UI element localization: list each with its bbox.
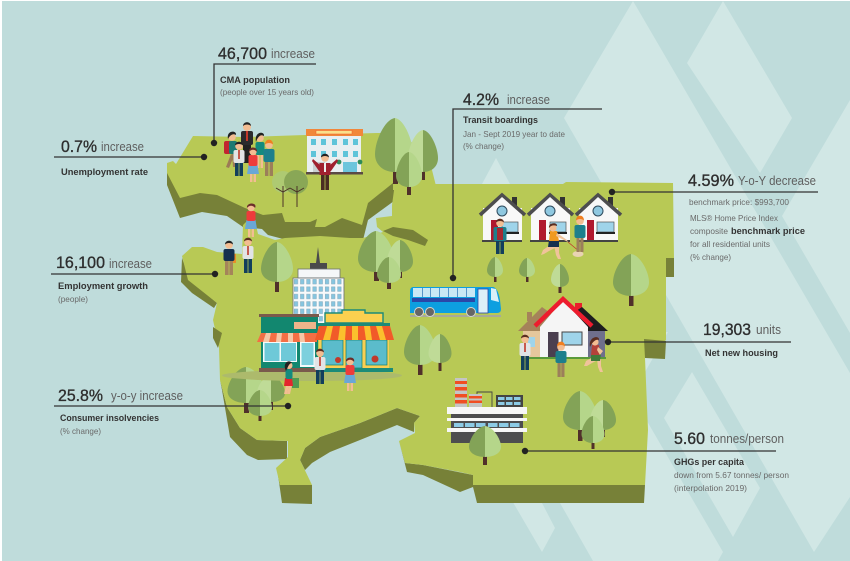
house 1 (480, 195, 525, 242)
callout: transit boardings: Transit boardings (463, 115, 538, 126)
girl at shop (344, 358, 356, 391)
callout: employment growth: (people) (58, 294, 88, 304)
callout: net new housing: Net new housing (705, 348, 778, 359)
man with tie (242, 238, 254, 273)
man at new house (520, 335, 530, 370)
callout: home price index: MLS® Home Price Index (690, 213, 779, 223)
boy at new house (556, 342, 566, 377)
callout: consumer insolvencies (54, 386, 291, 436)
callout: home price index: benchmark price: $993,700 (689, 197, 789, 207)
map top surface (167, 133, 674, 485)
callout: employment growth: 16,100 (56, 253, 105, 272)
callout: home price index: for all residential units (690, 239, 770, 249)
office tower (293, 247, 344, 324)
inner cliffs (213, 227, 666, 359)
callout: net new housing (605, 320, 791, 359)
hotel building (306, 129, 363, 174)
factory (447, 378, 527, 465)
callout: home price index: Y-o-Y decrease (738, 174, 816, 188)
man in white shirt (234, 142, 244, 176)
boy with bag (224, 241, 236, 275)
callout: CMA population: 46,700 (218, 44, 267, 63)
callout: home price index: (% change) (690, 252, 731, 262)
callout: CMA population: increase (271, 47, 315, 61)
man with glasses (241, 122, 253, 163)
callout: GHGs per capita: down from 5.67 tonnes/ person (674, 470, 789, 480)
background diamonds (482, 1, 850, 561)
callout: GHGs per capita: tonnes/person (710, 432, 784, 446)
callout: consumer insolvencies: Consumer insolvencies (60, 413, 159, 424)
callout: GHGs per capita: GHGs per capita (674, 457, 745, 468)
map (167, 133, 674, 504)
runner with dog (541, 223, 580, 259)
callout: home price index: composite (690, 226, 728, 236)
trees (228, 118, 649, 449)
callout: home price index (609, 171, 818, 262)
yellow shop (315, 310, 394, 372)
house 3 (576, 195, 621, 242)
teal shop (257, 314, 319, 372)
dog (572, 251, 584, 257)
people (224, 122, 603, 394)
woman jogging (584, 337, 603, 372)
man with orange hair (264, 140, 274, 176)
callout: consumer insolvencies: 25.8% (58, 386, 103, 405)
callout: transit boardings: 4.2% (463, 90, 499, 109)
callout: consumer insolvencies: y-o-y increase (111, 389, 183, 403)
man with orange hair at house (574, 216, 586, 252)
man at house (494, 219, 506, 254)
callout: GHGs per capita (522, 429, 789, 493)
callout: unemployment rate: 0.7% (61, 137, 97, 156)
callout: unemployment rate: increase (101, 140, 144, 154)
house 2 (528, 195, 573, 242)
man with newspaper (314, 349, 326, 384)
girl with red backpack (224, 132, 237, 168)
woman shopping (284, 361, 299, 394)
callout: net new housing: 19,303 (703, 320, 751, 339)
callout: unemployment rate: Unemployment rate (61, 167, 148, 178)
callout: transit boardings: increase (507, 93, 550, 107)
callout: CMA population: (people over 15 years old) (220, 87, 314, 97)
callout: employment growth (51, 253, 218, 304)
callout: home price index: 4.59% (688, 171, 734, 190)
callout: transit boardings (450, 90, 602, 281)
girl in teal (256, 133, 264, 168)
bus (410, 287, 501, 317)
new housing house (518, 299, 608, 359)
callout: employment growth: increase (109, 257, 152, 271)
callout: GHGs per capita: (interpolation 2019) (674, 483, 747, 493)
callout: transit boardings: Jan - Sept 2019 year to date (463, 129, 565, 139)
girl on the bridge (245, 204, 257, 237)
callout: home price index: benchmark price (731, 226, 805, 237)
callout: CMA population (211, 44, 316, 146)
callout: transit boardings: (% change) (463, 141, 504, 151)
callout: employment growth: Employment growth (58, 281, 148, 292)
girl in red shirt (247, 148, 259, 182)
man in red jacket (312, 154, 338, 190)
callout: GHGs per capita: 5.60 (674, 429, 705, 448)
callout: net new housing: units (756, 323, 781, 337)
map cliffs (167, 160, 674, 504)
callout: unemployment rate (54, 137, 207, 178)
callout: CMA population: CMA population (220, 75, 290, 86)
callout: consumer insolvencies: (% change) (60, 426, 101, 436)
three houses (480, 195, 621, 242)
shop shadow (222, 370, 402, 381)
